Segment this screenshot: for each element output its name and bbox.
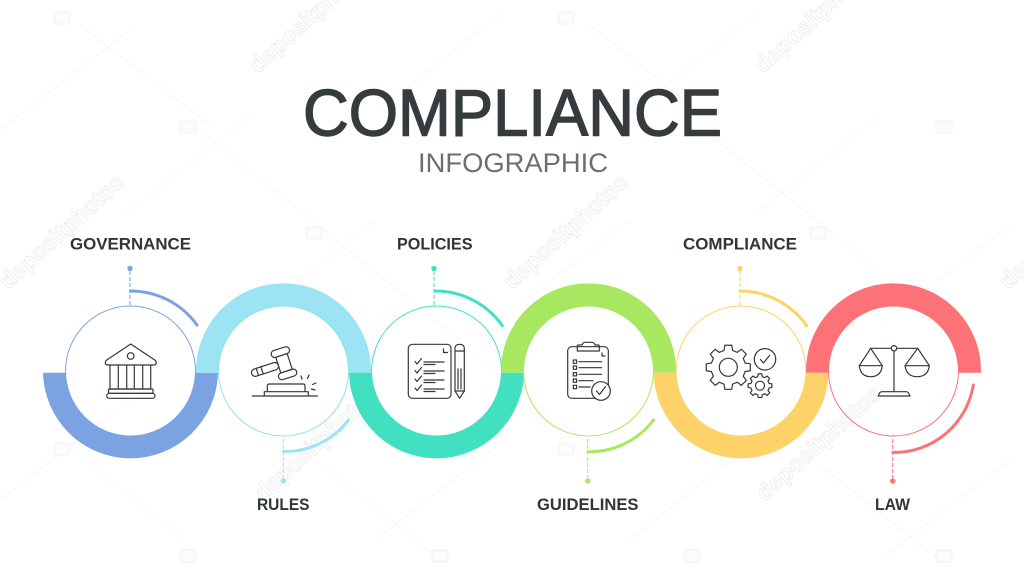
step: rules — [196, 283, 371, 514]
accent arc: compliance — [740, 291, 807, 326]
band: governance — [43, 373, 218, 458]
label: guidelines: GUIDELINES — [537, 496, 638, 514]
icon: checklist and pencil — [408, 344, 464, 398]
accent arc: guidelines — [588, 420, 654, 452]
step: governance — [43, 236, 218, 458]
step: guidelines — [501, 283, 676, 514]
step: law — [806, 283, 981, 514]
thin ring: rules — [218, 306, 348, 436]
accent arc: rules — [284, 420, 348, 451]
icon: clipboard with check — [568, 342, 610, 400]
background watermark: depositphotos — [751, 380, 886, 506]
dot: rules — [281, 478, 286, 484]
connector: policies — [433, 271, 435, 305]
band: compliance — [654, 373, 828, 458]
dot: compliance — [737, 266, 743, 271]
label: rules: RULES — [257, 496, 310, 514]
subtitle: INFOGRAPHIC — [418, 148, 608, 178]
connector: law — [892, 439, 894, 478]
label: policies: POLICIES — [397, 236, 472, 254]
label: law: LAW — [875, 496, 910, 514]
dot: law — [890, 478, 895, 484]
band: rules — [196, 283, 371, 373]
thin ring: compliance — [676, 306, 806, 436]
thin ring: governance — [66, 306, 196, 436]
title: COMPLIANCE — [303, 76, 722, 150]
dot: policies — [431, 266, 437, 271]
accent arc: policies — [435, 291, 502, 326]
thin ring: guidelines — [524, 306, 654, 436]
label: governance: GOVERNANCE — [70, 236, 191, 254]
connector: compliance — [739, 271, 741, 305]
icon: gears with check — [706, 345, 776, 398]
band: policies — [349, 373, 524, 458]
icon: balance scales — [859, 346, 929, 396]
accent arc: governance — [130, 291, 197, 325]
thin ring: policies — [372, 306, 502, 436]
connector: rules — [282, 439, 284, 478]
step: compliance — [654, 236, 828, 458]
band: law — [806, 283, 981, 373]
dot: governance — [127, 266, 133, 271]
label: compliance: COMPLIANCE — [683, 236, 797, 254]
accent arc: law — [893, 385, 973, 452]
connector: governance — [129, 271, 131, 305]
connector: guidelines — [587, 439, 589, 478]
background watermark: depositphotos — [498, 168, 633, 294]
thin ring: law — [828, 306, 958, 436]
icon: gavel — [247, 346, 317, 396]
dot: guidelines — [585, 478, 590, 484]
background watermark: depositphotos — [249, 380, 384, 506]
step: policies — [349, 236, 524, 458]
icon: bank building — [105, 344, 156, 398]
band: guidelines — [501, 283, 676, 373]
